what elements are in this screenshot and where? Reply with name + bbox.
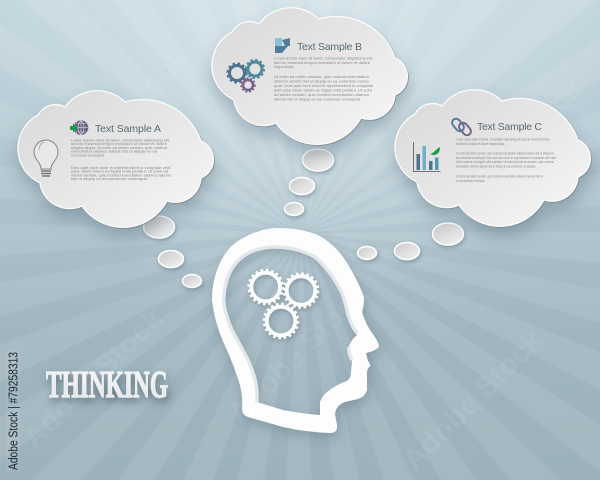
body text A: sed do eiusmod tempor incididunt ut labore et dolore [71, 142, 167, 146]
cloud A shape [18, 91, 213, 227]
body text B: ullamco laboris nisi ut aliquip ex ea commodo conse- [274, 80, 371, 84]
body text C: ex ea commodo consequat. [456, 179, 485, 183]
body text C: ea commodo consequat. Duis aute irure dolor in reprehenderit in voluptate velit esse [456, 156, 556, 160]
body text B: sed do eiusmod tempor incididunt ut labore et dolore [274, 61, 370, 65]
watermarks: Adobe Stock [397, 324, 550, 477]
body text A: esse cillum dolore eu fugiat nulla pariatur. Ut enim ad [71, 170, 168, 174]
watermarks: Adobe Stock [17, 302, 170, 455]
body text B: Ut enim ad minim veniam, quis nostrud exercitation [274, 75, 369, 79]
icon: coloured gears [228, 60, 264, 92]
gear bottom [264, 304, 298, 338]
panel: cloud C [395, 90, 590, 226]
cloud C shape [395, 90, 590, 226]
watermarks: Adobe Stock [42, 42, 195, 195]
body text B: velit esse cillum dolore eu fugiat nulla pariatur. Ut enim [274, 88, 372, 92]
body text A: Duis aute irure dolor in reprehenderit in voluptate velit [71, 166, 170, 170]
icon: chain link [450, 117, 473, 137]
panel: cloud B [212, 8, 407, 144]
body text B: magna aliqua. [274, 65, 294, 69]
body text C [456, 138, 556, 183]
thought bubbles to cloud C [358, 223, 464, 260]
body text C: cillum dolore eu fugiat nulla pariatur. Ut enim ad minim veniam, quis nostrud [456, 160, 554, 164]
body text C: incididunt ut labore et dolore magna aliqua. [456, 142, 505, 146]
body text A: minim veniam, quis nostrud exercitation ullamco laboris [71, 173, 171, 177]
thought bubbles to cloud A [144, 216, 202, 288]
icon: blue arrows [275, 38, 290, 53]
title: THINKING: THINKING [46, 364, 168, 406]
body text A: exercitation ullamco laboris nisi ut aliquip ex ea [71, 150, 158, 154]
body text B [274, 56, 373, 102]
cloud B shape [212, 8, 407, 144]
watermarks: Adobe Stock [437, 72, 590, 225]
gear top right [284, 274, 318, 308]
body text B: Lorem ipsum dolor sit amet, consectetur adipisicing elit, [274, 56, 373, 60]
body text B: quat. Duis aute irure dolor in reprehenderit in voluptate [274, 84, 373, 88]
watermarks: Adobe Stock [222, 277, 375, 430]
body text A: Lorem ipsum dolor sit amet, consectetur adipisicing elit, [71, 138, 170, 142]
body text A: commodo consequat. [71, 153, 105, 157]
thought bubbles to cloud B [284, 149, 334, 216]
vertical stock label: Adobe Stock | #79258313 [6, 352, 20, 470]
inner bevel [224, 247, 357, 402]
body text C: Ut enim ad minim veniam, quis nostrud exercitation ullamco laboris nisi ut [456, 174, 543, 178]
body text C: Lorem ipsum dolor sit amet, consectetur adipisicing elit, sed do eiusmod tempor [456, 138, 551, 142]
icon: light bulb [34, 140, 58, 176]
panel: cloud A [18, 91, 213, 227]
head silhouette [212, 228, 379, 433]
body text C: exercitation ullamco laboris nisi ut aliquip ex ea commodo consequat. [456, 164, 536, 168]
head outline band [212, 228, 379, 433]
chart: bar chart icon [414, 142, 440, 172]
body text B: laboris nisi ut aliquip ex ea commodo consequat. [274, 98, 361, 102]
body text B: ad minim veniam, quis nostrud exercitation ullamco [274, 93, 369, 97]
heading: Text Sample A: Text Sample A [95, 123, 161, 135]
heading: Text Sample C: Text Sample C [477, 121, 542, 133]
icon: globe with arrow [70, 120, 88, 135]
heading: Text Sample B: Text Sample B [297, 41, 362, 53]
body text A [71, 138, 171, 181]
body text A: magna aliqua. Ut enim ad minim veniam, quis nostrud [71, 146, 167, 150]
body text A: nisi ut aliquip ex ea commodo consequat. [71, 177, 148, 181]
gear top left [249, 270, 283, 304]
icon: white brain gears [249, 270, 318, 338]
body text C: Ut enim ad minim veniam, quis nostrud exercitation ullamco laboris nisi ut aliquip ex [456, 152, 554, 156]
